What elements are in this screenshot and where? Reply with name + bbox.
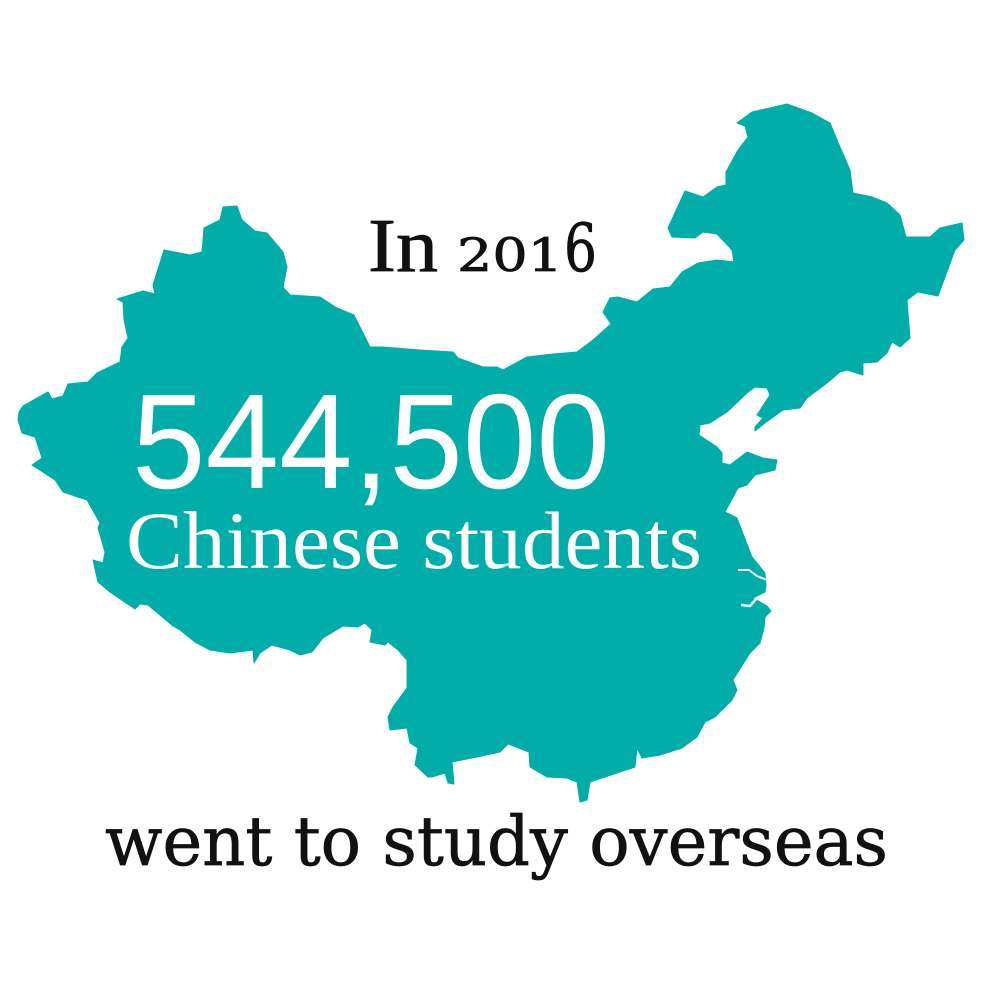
caption: went to study overseas: went to study overseas (105, 803, 888, 882)
map of China (18, 104, 964, 802)
heading: In 2016 (368, 204, 597, 288)
big number: 544,500: 544,500 (132, 366, 610, 517)
label: Chinese students: Chinese students (126, 495, 702, 586)
heading: In 2016: 201 (457, 228, 563, 282)
heading: In 2016: 6 (564, 210, 597, 287)
heading: In 2016: In (368, 204, 438, 288)
